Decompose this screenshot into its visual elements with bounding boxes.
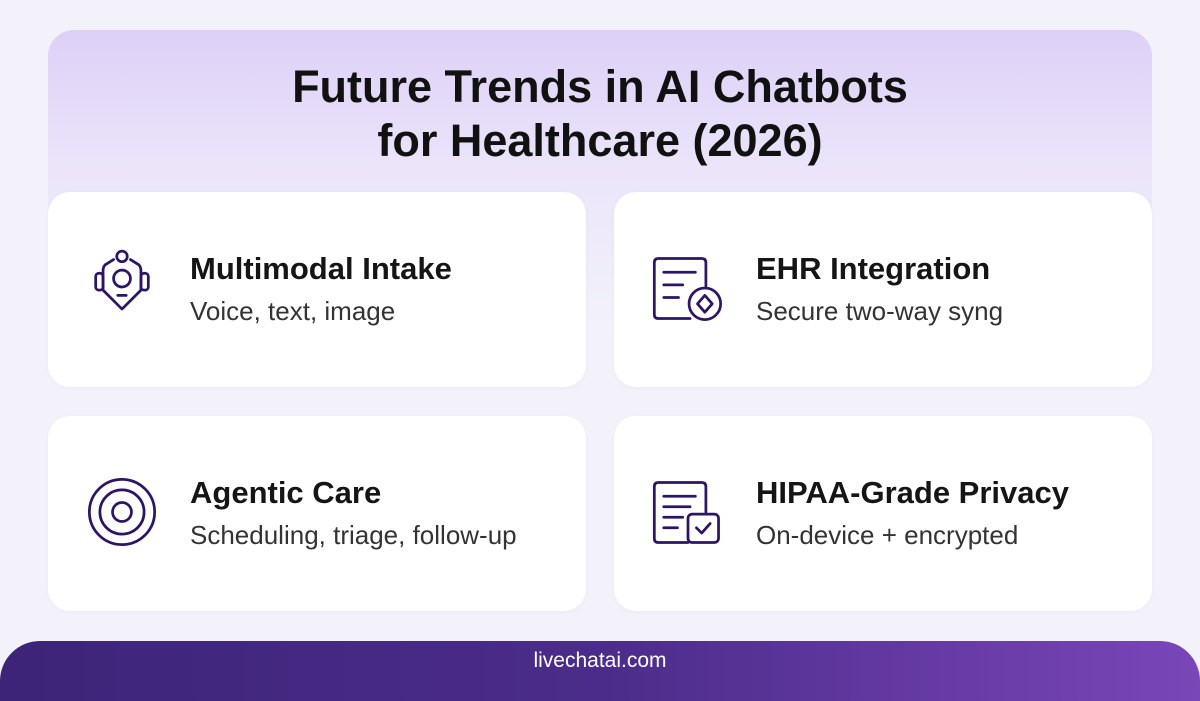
footer bar: livechatai.com	[533, 649, 667, 672]
icon: target	[88, 478, 156, 546]
card: multimodal intake: Multimodal Intake	[190, 251, 452, 286]
card: multimodal intake	[48, 192, 586, 387]
icon: document check	[652, 481, 720, 544]
icon: document sync	[652, 257, 722, 321]
footer bar	[0, 641, 1200, 701]
title: Future Trends in AI Chatbots	[292, 61, 908, 112]
card: EHR integration	[614, 192, 1152, 387]
card: HIPAA privacy: HIPAA-Grade Privacy	[756, 475, 1069, 510]
title: for Healthcare (2026)	[377, 115, 823, 166]
card: multimodal intake: Voice, text, image	[190, 296, 395, 326]
card: HIPAA privacy: On-device + encrypted	[756, 520, 1018, 550]
header panel	[48, 30, 1152, 330]
card: agentic care	[48, 416, 586, 611]
card: EHR integration: EHR Integration	[756, 251, 990, 286]
card: agentic care: Scheduling, triage, follow-up	[190, 520, 517, 550]
icon: robot	[94, 250, 150, 310]
card: HIPAA privacy	[614, 416, 1152, 611]
card: EHR integration: Secure two-way syng	[756, 296, 1003, 326]
card: agentic care: Agentic Care	[190, 475, 381, 510]
title	[292, 61, 908, 166]
